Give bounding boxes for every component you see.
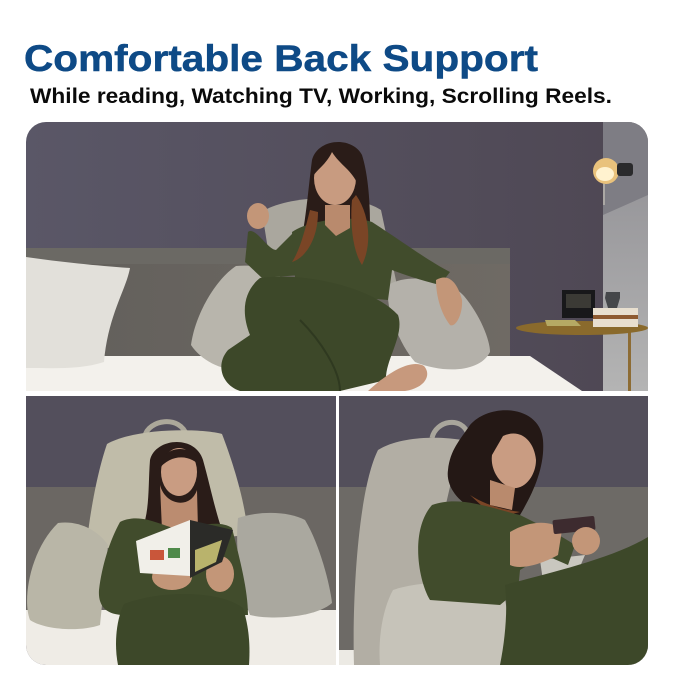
bed bbox=[26, 610, 336, 665]
legs bbox=[116, 614, 250, 665]
bed mattress bbox=[26, 356, 582, 391]
neck and face bbox=[325, 205, 350, 236]
back support pillow: right arm bbox=[388, 279, 490, 369]
woman bbox=[221, 142, 462, 391]
raised arm bbox=[245, 231, 295, 278]
legs bbox=[221, 277, 399, 391]
back support pillow: centre bbox=[264, 199, 396, 284]
woman bbox=[418, 410, 648, 665]
headboard bbox=[339, 487, 648, 665]
bed bbox=[339, 650, 648, 665]
pillow handle bbox=[432, 422, 468, 438]
icon: wall lamp bbox=[593, 158, 633, 205]
legs bbox=[500, 537, 648, 665]
hair ends bbox=[351, 195, 368, 265]
pillow handle bbox=[145, 422, 187, 436]
right side pillow bbox=[237, 513, 332, 617]
panel: woman scrolling on phone bbox=[339, 396, 648, 665]
hair back bbox=[304, 142, 370, 226]
white pillow bbox=[26, 257, 130, 368]
right hand bbox=[436, 278, 462, 325]
panel: woman reading a book bbox=[26, 396, 336, 665]
hands bbox=[152, 574, 192, 590]
book bbox=[136, 520, 190, 576]
foot bbox=[368, 364, 427, 391]
title: Comfortable Back Support bbox=[24, 38, 538, 79]
hair bbox=[448, 410, 543, 515]
right wall bbox=[603, 122, 648, 391]
hands and phone bbox=[510, 523, 562, 567]
torso bbox=[292, 219, 450, 300]
woman bbox=[99, 442, 249, 665]
panel: woman relaxing on bed with back support pillow bbox=[26, 122, 648, 392]
subtitle: While reading, Watching TV, Working, Scrolling Reels. bbox=[30, 85, 612, 108]
back support pillow bbox=[86, 430, 248, 550]
body bbox=[99, 518, 248, 615]
headboard bbox=[26, 487, 336, 617]
left side pillow bbox=[27, 522, 108, 629]
front arm pillow bbox=[380, 582, 508, 665]
back support pillow bbox=[354, 438, 462, 665]
headboard bbox=[87, 264, 510, 356]
body bbox=[418, 501, 575, 605]
right background pillow bbox=[540, 555, 585, 575]
face bbox=[492, 433, 536, 488]
back support pillow: left arm bbox=[191, 266, 282, 370]
side table with clock and books bbox=[516, 290, 648, 392]
infographic canvas bbox=[25, 44, 648, 665]
